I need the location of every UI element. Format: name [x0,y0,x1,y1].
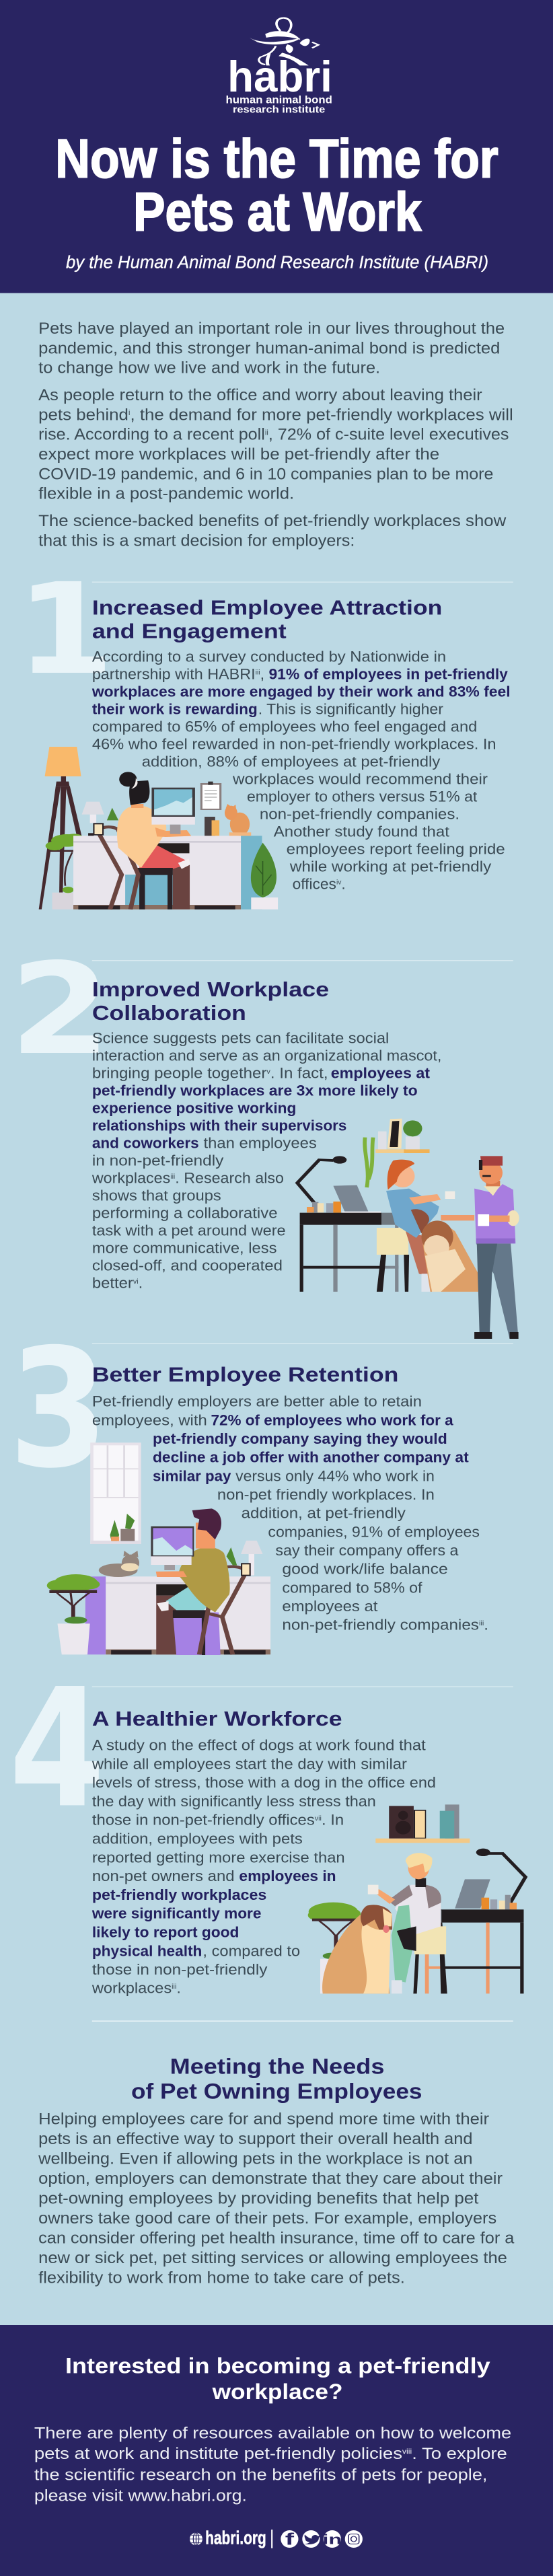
footer body text: . To explore [412,2444,507,2462]
body text 4: pet-friendly workplaces [92,1887,266,1903]
body text 1: partnership with HABRI [92,666,334,683]
body text 3: iii [479,1619,484,1627]
body text 2: better [92,1276,151,1292]
heading: meeting the needs: of Pet Owning Employees [131,2079,422,2104]
body text 2: closed-off, and cooperated [92,1258,283,1274]
heading 1: Increased Employee Attraction [92,595,442,619]
body text 1: . This is significantly higher [258,701,443,718]
title [55,128,499,242]
illustration: man at desk with cat [47,1442,270,1655]
body text 2: performing a collaborative [92,1206,278,1222]
logo: habri [226,18,332,115]
footer body text [34,2423,511,2505]
intro text [38,319,513,550]
body text 4: those in non-pet-friendly [92,1962,268,1978]
body text 1 [91,649,511,893]
numeral 2: 2 [9,936,111,1083]
body text 4: non-pet owners and [92,1868,235,1884]
illustration: coworkers with collie dog [297,1119,519,1339]
heading: meeting the needs [131,2055,422,2104]
intro text: flexible in a post-pandemic world. [38,484,294,503]
panel: benefit 1 [16,557,513,910]
header banner [0,0,553,293]
heading 2 [92,978,329,1025]
body text 4: those in non-pet-friendly offices [92,1812,415,1829]
body text 3: non-pet friendly workplaces. In [217,1487,435,1503]
body text: meeting the needs [38,2109,515,2287]
body text 2: than employees [203,1136,317,1152]
body text 4: reported getting more exercise than [92,1849,345,1866]
heading 4: A Healthier Workforce [92,1707,342,1730]
body text 2: bringing people together [92,1066,343,1082]
intro text: i [128,408,130,416]
logo: habri: habri [227,52,332,101]
logo: habri: research institute [233,105,325,115]
body text 4: employees in [239,1868,336,1884]
heading 2: Improved Workplace [92,978,329,1001]
icon: facebook: f [285,2530,295,2549]
body text 3: employees at [282,1598,377,1615]
heading 3: Better Employee Retention [92,1362,398,1386]
numeral 1: 1 [16,557,114,703]
body text 2 [91,1031,441,1292]
body text 4: addition, employees with pets [92,1831,303,1847]
body text 3: . [484,1617,488,1633]
footer body text: viii [402,2448,412,2456]
intro text: pets behind [38,405,170,424]
heading 1: and Engagement [92,619,287,642]
icon: instagram [345,2530,363,2548]
body text 3: similar pay [153,1468,231,1485]
body text 2: workplaces [92,1171,209,1187]
icon: linkedin: in [322,2531,342,2547]
body text 2: iii [170,1173,175,1180]
body text 2: . [139,1276,143,1292]
panel: meeting the needs [38,2055,515,2287]
body text 4: were significantly more [91,1906,261,1922]
panel: benefit 2 [9,936,519,1339]
body text 4: . [176,1981,181,1997]
body text 4: vii [315,1814,322,1822]
body text 2: more communicative, less [92,1241,277,1257]
body text 3: good work/life balance [282,1561,448,1578]
heading 2: Collaboration [92,1001,246,1025]
body text 2: shows that groups [92,1188,221,1204]
body text 2: . In fact, [270,1066,328,1082]
body text 1: iv [336,879,342,886]
intro text: rise. According to a recent poll [38,425,378,443]
body text 2: and coworkers [92,1136,199,1152]
heading: meeting the needs: Meeting the Needs [170,2055,384,2079]
icon: facebook [281,2530,298,2549]
body text 1: iii [256,669,260,676]
body text 1: offices [293,876,359,893]
body text 3: addition, at pet-friendly [242,1506,406,1522]
illustration: person at desk with large dog [308,1804,525,1993]
body text 1: their work is rewarding [92,701,258,718]
illustration: woman at desk with cat [39,747,278,910]
panel: benefit 4 [9,1653,525,2022]
body text 1: Another study found that [274,823,449,840]
footer banner [0,2325,553,2576]
body text 2: employees at [331,1066,430,1082]
body text 2: Science suggests pets can facilitate social [92,1031,389,1047]
icon: globe [190,2533,202,2545]
body text 4: likely to report good [92,1924,239,1941]
body text 2: experience positive working [92,1101,296,1117]
footer heading [65,2353,490,2404]
body text 3: compared to 58% of [282,1580,422,1596]
intro text: ii [265,428,268,437]
logo: habri: human animal bond [226,94,332,106]
body text 1: , [260,666,264,683]
panel: benefit 3 [9,1313,513,1655]
numeral 4: 4 [9,1653,105,1844]
numeral 3: 3 [9,1313,108,1504]
footer body text: please visit www.habri.org. [34,2487,247,2505]
body text 4: , compared to [202,1943,300,1960]
body text 2: v [266,1068,270,1075]
body text 3: employees, with [92,1412,207,1429]
intro text: that this is a smart decision for employers: [38,531,355,550]
body text 2: . Research also [175,1171,284,1187]
body text 1: . [341,876,346,893]
intro text: to change how we live and work in the future. [38,359,380,377]
body text 4: workplaces [92,1981,209,1997]
icon: twitter [302,2530,320,2548]
body text 2: task with a pet around were [92,1223,286,1239]
body text 2: in non-pet-friendly [92,1153,224,1169]
footer heading: workplace? [212,2380,343,2404]
body text 2: relationships with their supervisors [92,1118,346,1134]
body text 4: . In [322,1812,344,1829]
body text 4: while all employees start the day with similar [91,1756,407,1773]
body text 3: versus only 44% who work in [235,1468,435,1485]
body text 1: non-pet-friendly companies. [260,806,459,823]
body text 4 [91,1738,436,1997]
body text 2: vi [133,1278,139,1285]
body text 4: iii [172,1983,176,1990]
footer body text: pets at work and institute pet-friendly policies [34,2444,539,2462]
body text 4: the day with significantly less stress than [92,1794,376,1810]
footer banner: habri.org [205,2528,266,2548]
body text 3 [92,1394,488,1633]
heading 1 [92,595,442,642]
body text 4: physical health [92,1943,202,1960]
body text 3: say their company offers a [275,1543,459,1559]
